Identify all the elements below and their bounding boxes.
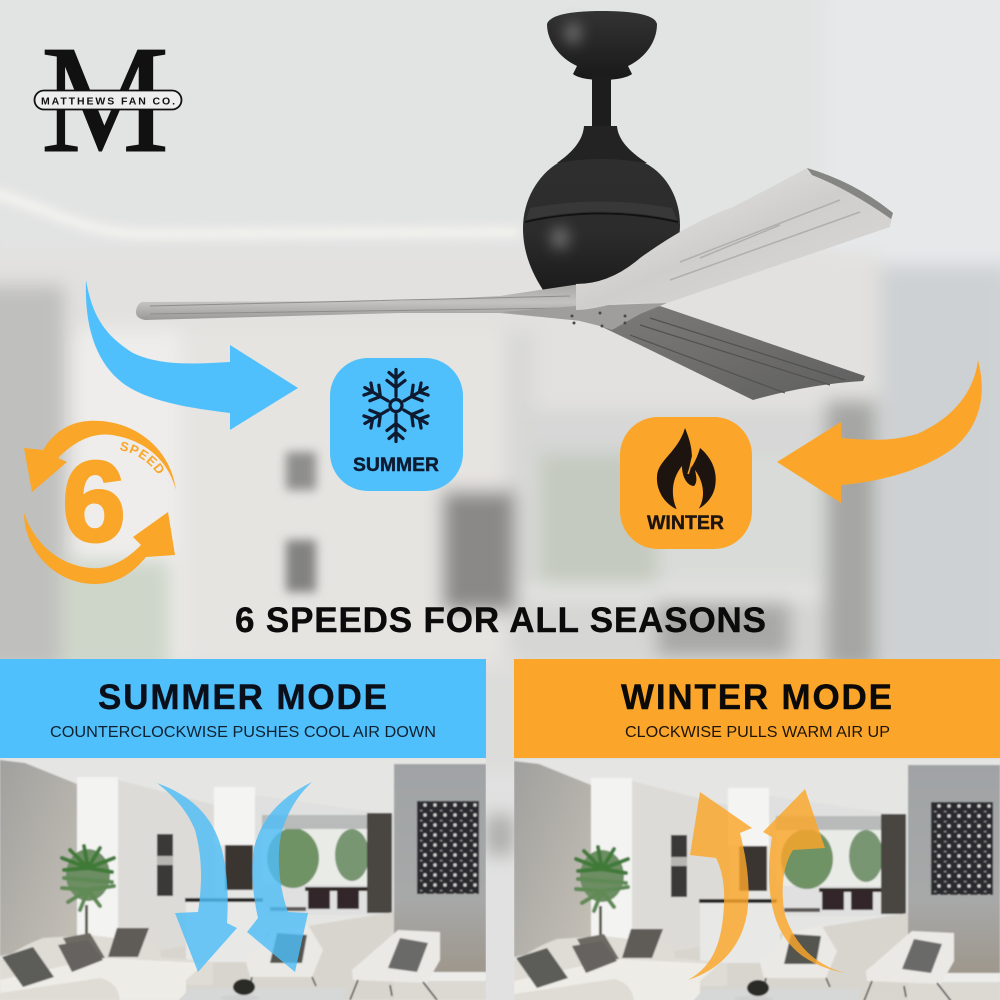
- arrow: cool air left: [157, 783, 237, 972]
- logo: Matthews Fan Co.: M: [41, 15, 169, 185]
- summer banner: [0, 659, 486, 758]
- blade: dark lower: [598, 306, 865, 400]
- label: summer: SUMMER: [353, 455, 439, 476]
- panel: summer mode: [0, 659, 486, 1000]
- six speed badge: [24, 420, 176, 584]
- heading: 6 SPEEDS FOR ALL SEASONS: [235, 601, 766, 640]
- winter subtitle: CLOCKWISE PULLS WARM AIR UP: [625, 724, 890, 741]
- canopy: [547, 11, 657, 80]
- arrow: winter orange curved: [777, 360, 982, 503]
- panel: winter mode: [514, 659, 1000, 1000]
- motor housing: [523, 22, 680, 292]
- blade: left: [136, 284, 582, 321]
- arrow: upper ring: [24, 421, 176, 492]
- arrow: lower ring: [24, 512, 175, 584]
- ceiling fan: [136, 11, 893, 400]
- icon: flame: [657, 428, 716, 510]
- winter banner: [514, 659, 1000, 758]
- summer badge: [330, 358, 463, 491]
- hub plate: [500, 303, 667, 330]
- winter title: WINTER MODE: [621, 678, 892, 717]
- downrod: [592, 75, 611, 129]
- winter room photo: [514, 759, 1000, 1000]
- label: winter: WINTER: [647, 513, 724, 534]
- logo: Matthews Fan Co.: MATTHEWS FAN CO.: [41, 96, 175, 108]
- label: speed: SPEED: [120, 442, 164, 474]
- summer subtitle: COUNTERCLOCKWISE PUSHES COOL AIR DOWN: [50, 724, 436, 741]
- blade: light upper right: [576, 168, 893, 310]
- numeral six: 6: [62, 439, 126, 566]
- icon: snowflake: [360, 370, 432, 442]
- arrow: cool air right: [247, 782, 312, 972]
- arrow: warm air left: [688, 792, 752, 980]
- summer title: SUMMER MODE: [98, 678, 387, 717]
- winter badge: [620, 417, 752, 549]
- arrow: warm air right: [763, 789, 845, 973]
- arrow: summer blue curved: [86, 280, 298, 430]
- summer room photo: [0, 758, 486, 1000]
